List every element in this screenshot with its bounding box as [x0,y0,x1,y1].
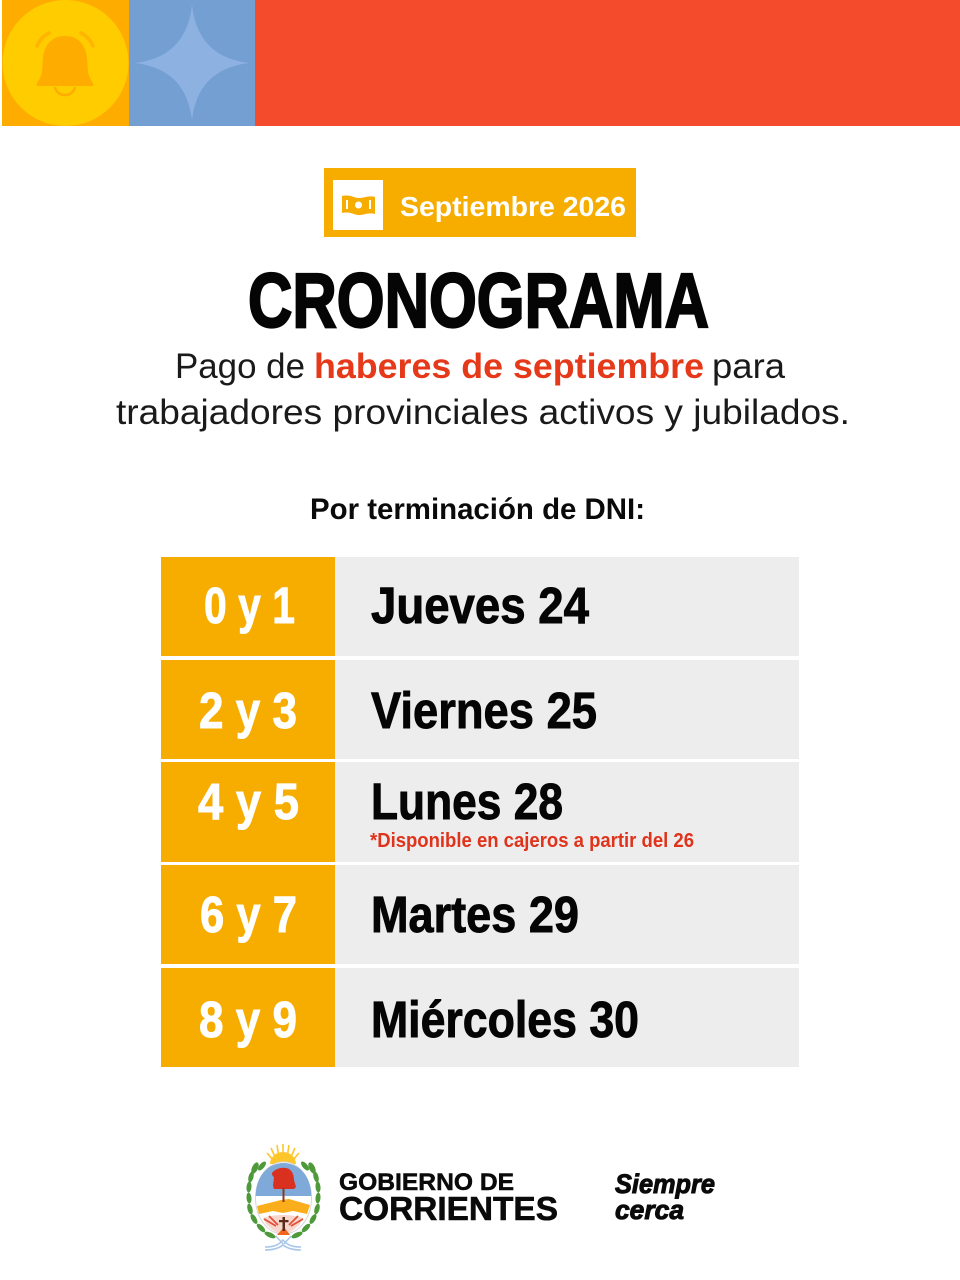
laurel right [291,1160,321,1240]
row: 2 y 3: Viernes 25 [371,682,597,739]
subtitle [116,347,850,432]
row: 6 y 7: 6 y 7 [200,886,297,943]
slogan: cerca [615,1195,684,1225]
row: 8 y 9: 8 y 9 [199,991,297,1048]
laurel left [246,1160,276,1240]
subtitle: Pago de [175,347,305,386]
subtitle: haberes de septiembre [314,347,704,386]
slogan [615,1169,715,1225]
row: 4 y 5: 4 y 5 [198,773,299,830]
row: 6 y 7: Martes 29 [371,886,579,943]
row: 0 y 1: 0 y 1 [204,577,295,634]
wordmark: GOBIERNO DE [339,1169,514,1196]
wordmark: CORRIENTES [339,1190,558,1227]
icon: four-point star [135,5,249,120]
schedule table [161,557,799,1067]
row: 6 y 7 [161,865,799,964]
row: 0 y 1: Jueves 24 [371,577,590,634]
row: 0 y 1 [161,557,799,656]
row: 2 y 3: 2 y 3 [199,682,297,739]
availability note: *Disponible en cajeros a partir del 26 [370,830,694,852]
row: 4 y 5 [161,762,799,862]
subtitle: trabajadores provinciales activos y jubilados. [116,393,850,432]
title: CRONOGRAMA [248,258,709,344]
footer logos [246,1144,715,1250]
slogan: Siempre [615,1169,715,1199]
row: 8 y 9: Miércoles 30 [371,991,639,1048]
icon: bell [2,0,128,126]
section label: Por terminación de DNI: [310,493,645,526]
row: 4 y 5: Lunes 28 [371,773,563,830]
month badge [324,168,636,237]
row: 2 y 3 [161,660,799,759]
top banner [2,0,960,126]
row: 8 y 9 [161,968,799,1067]
badge text: Septiembre 2026 [400,191,626,222]
subtitle: para [712,347,786,386]
icon: provincial coat of arms [246,1144,321,1250]
icon: banknote [342,195,375,215]
wordmark [339,1169,558,1227]
